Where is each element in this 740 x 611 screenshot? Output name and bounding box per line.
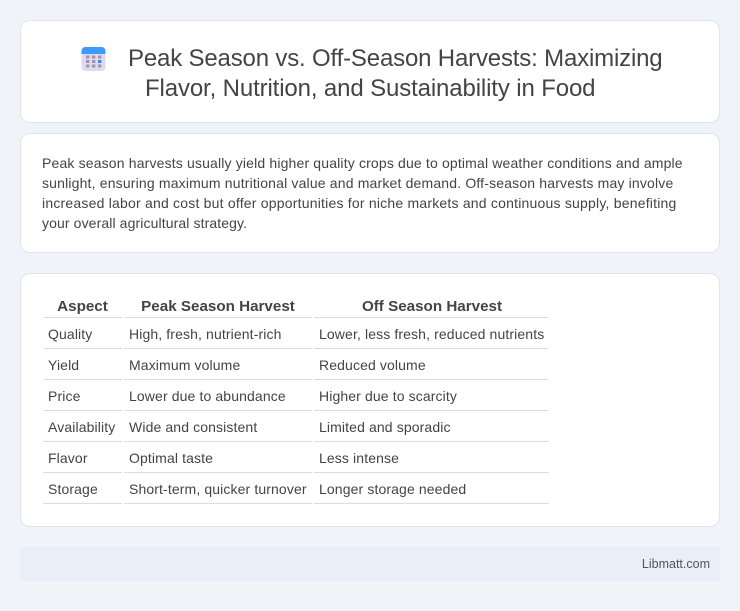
row: availability: Wide and consistent [129, 419, 257, 435]
table header: Off Season Harvest [362, 298, 502, 315]
comparison table [43, 298, 549, 504]
summary paragraph: sunlight, ensuring maximum nutritional value and market demand. Off-season harvests may involve [42, 175, 673, 191]
icon: calendar [82, 47, 106, 71]
row: quality: Lower, less fresh, reduced nutrients [319, 326, 544, 342]
table header: Aspect [57, 298, 108, 315]
row: quality: Quality [48, 326, 92, 342]
row: storage: Short-term, quicker turnover [129, 481, 307, 497]
row: flavor: Optimal taste [129, 450, 213, 466]
row: availability [48, 419, 451, 435]
row: price: Higher due to scarcity [319, 388, 457, 404]
summary paragraph: your overall agricultural strategy. [42, 215, 247, 231]
row: flavor [48, 450, 399, 466]
row: storage [48, 481, 466, 497]
row: flavor: Less intense [319, 450, 399, 466]
summary paragraph: Peak season harvests usually yield higher quality crops due to optimal weather conditions and ample [42, 155, 683, 171]
panel: summary text [20, 133, 720, 253]
title: Peak Season vs. Off-Season Harvests: Maximizing [128, 45, 662, 72]
title: Flavor, Nutrition, and Sustainability in Food [145, 75, 595, 102]
row: yield [48, 357, 426, 373]
row: availability: Limited and sporadic [319, 419, 451, 435]
row: price: Price [48, 388, 80, 404]
summary paragraph: increased labor and cost but offer opportunities for niche markets and continuous supply, benefiting [42, 195, 677, 211]
table header [57, 298, 502, 315]
row: yield: Reduced volume [319, 357, 426, 373]
row: price [48, 388, 457, 404]
table header: Peak Season Harvest [141, 298, 295, 315]
panel: comparison table [20, 273, 720, 527]
row: price: Lower due to abundance [129, 388, 286, 404]
title [128, 45, 662, 102]
summary paragraph [42, 155, 683, 231]
footer credit: Libmatt.com [642, 557, 710, 571]
row: quality [48, 326, 544, 342]
row: yield: Yield [48, 357, 79, 373]
row: flavor: Flavor [48, 450, 88, 466]
panel: title header [20, 20, 720, 123]
row: yield: Maximum volume [129, 357, 240, 373]
row: storage: Longer storage needed [319, 481, 466, 497]
row: availability: Availability [48, 419, 115, 435]
footer bar [20, 547, 720, 581]
row: storage: Storage [48, 481, 98, 497]
row: quality: High, fresh, nutrient-rich [129, 326, 282, 342]
